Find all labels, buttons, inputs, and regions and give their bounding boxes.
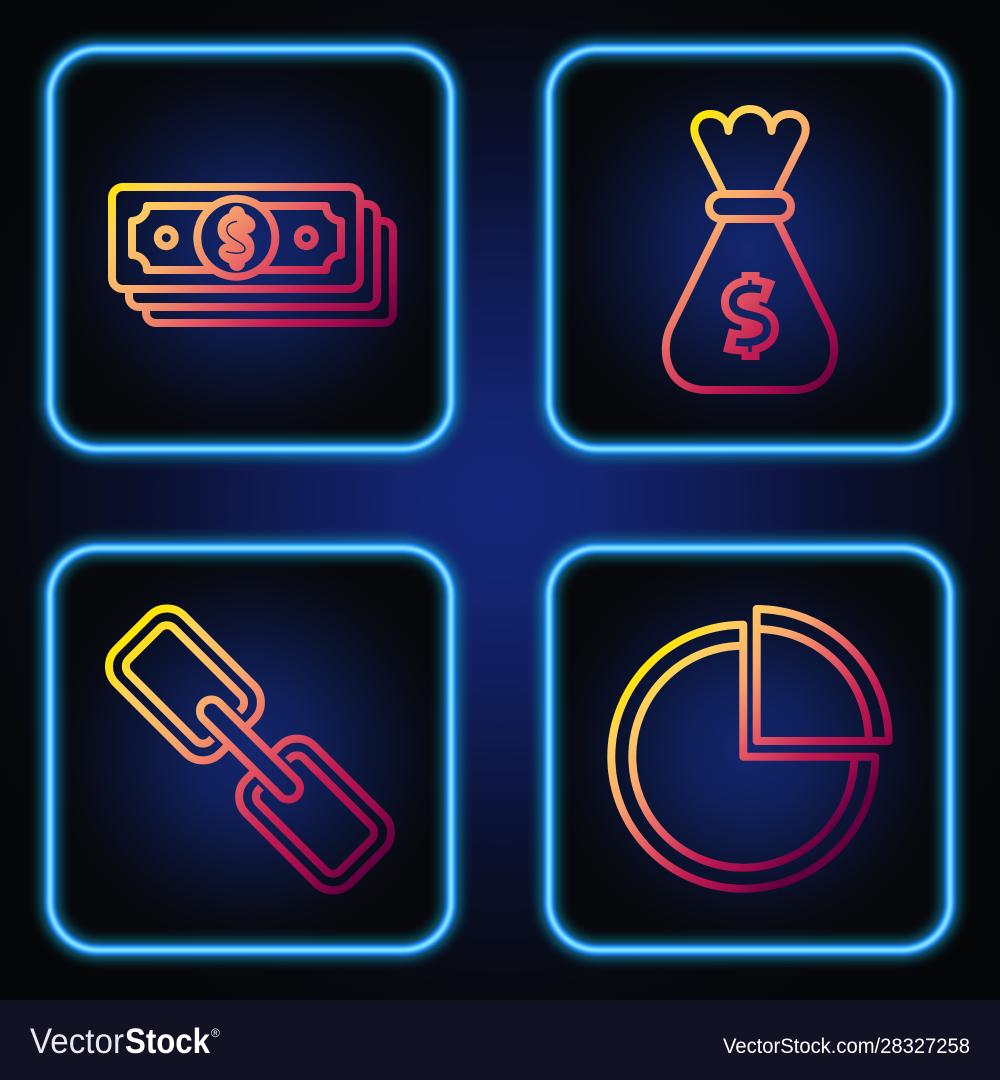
brand logo text: Vector (30, 1022, 124, 1061)
panel: chain link (50, 548, 451, 950)
neon frame: pie chart (549, 548, 950, 950)
footer bar (0, 1000, 1000, 1080)
icon: pie chart (611, 609, 889, 889)
footer bar: ® (211, 1026, 220, 1040)
footer bar: Stock (125, 1022, 210, 1061)
neon frame: chain link (50, 548, 451, 950)
panel: money bag (549, 49, 950, 449)
panel: banknotes (50, 49, 451, 449)
icon: stack of banknotes (112, 187, 393, 323)
image id text: VectorStock.com/28327258 (723, 1035, 970, 1058)
neon frame: banknotes (50, 49, 451, 449)
icon: dollar sign on bag (726, 272, 771, 360)
icon: dollar sign on note (226, 214, 247, 263)
icon: chain link (99, 599, 401, 900)
icon: money bag (666, 109, 834, 390)
neon frame: money bag (549, 49, 950, 449)
panel: pie chart (549, 548, 950, 950)
